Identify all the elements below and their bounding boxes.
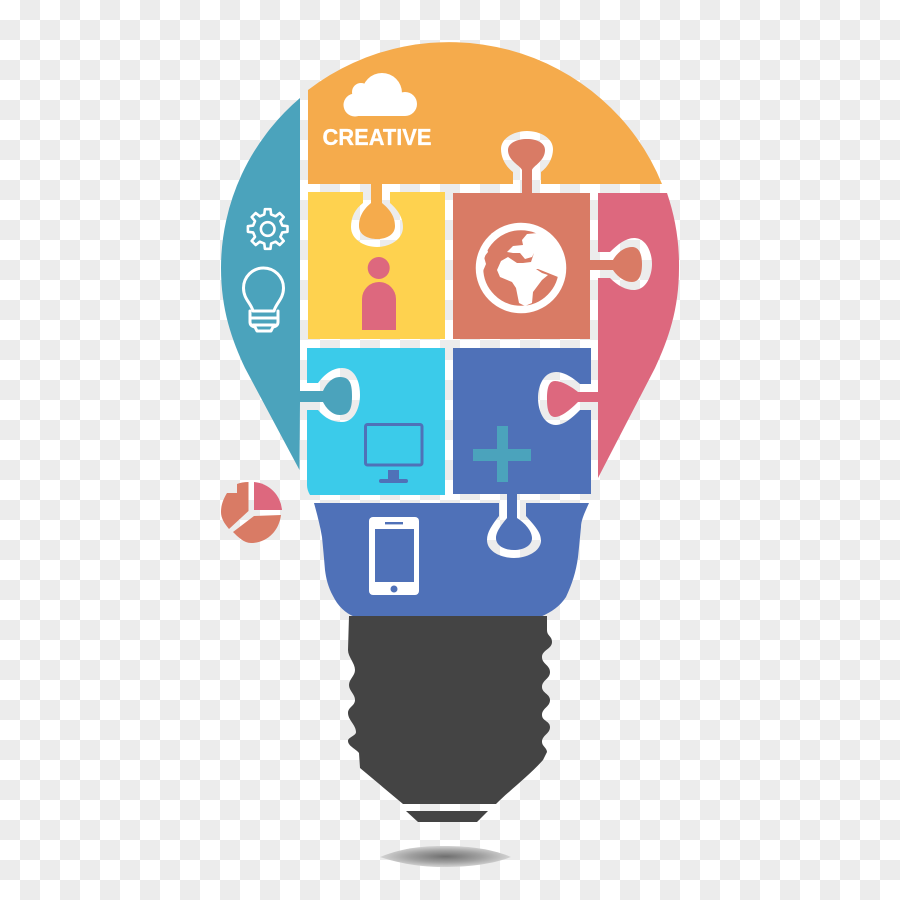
panel: salmon puzzle piece: [453, 139, 642, 339]
icon: monitor: [366, 424, 422, 483]
icon: cloud: [344, 73, 417, 116]
icon: plus: [473, 426, 531, 482]
panel: blue plus puzzle piece: [453, 348, 591, 550]
heading: creative: CREATIVE: [322, 124, 432, 150]
panel: blue bottom puzzle piece: [314, 503, 589, 617]
icon: gear: [248, 209, 288, 249]
panel: yellow puzzle piece: [308, 192, 445, 339]
bulb base tip: [406, 811, 488, 822]
icon: smartphone: [369, 517, 419, 595]
icon: globe: [479, 226, 564, 310]
panel: cyan puzzle piece: [307, 348, 445, 495]
chart icon: pie chart: [221, 482, 282, 543]
ground shadow: [380, 846, 511, 867]
icon: person: [362, 257, 396, 330]
bulb screw base: [348, 616, 552, 804]
panel: orange creative puzzle piece: [308, 42, 662, 239]
panel: teal puzzle piece: [221, 98, 352, 470]
panel: pink puzzle piece: [547, 193, 679, 478]
icon: light bulb outline: [244, 268, 284, 331]
